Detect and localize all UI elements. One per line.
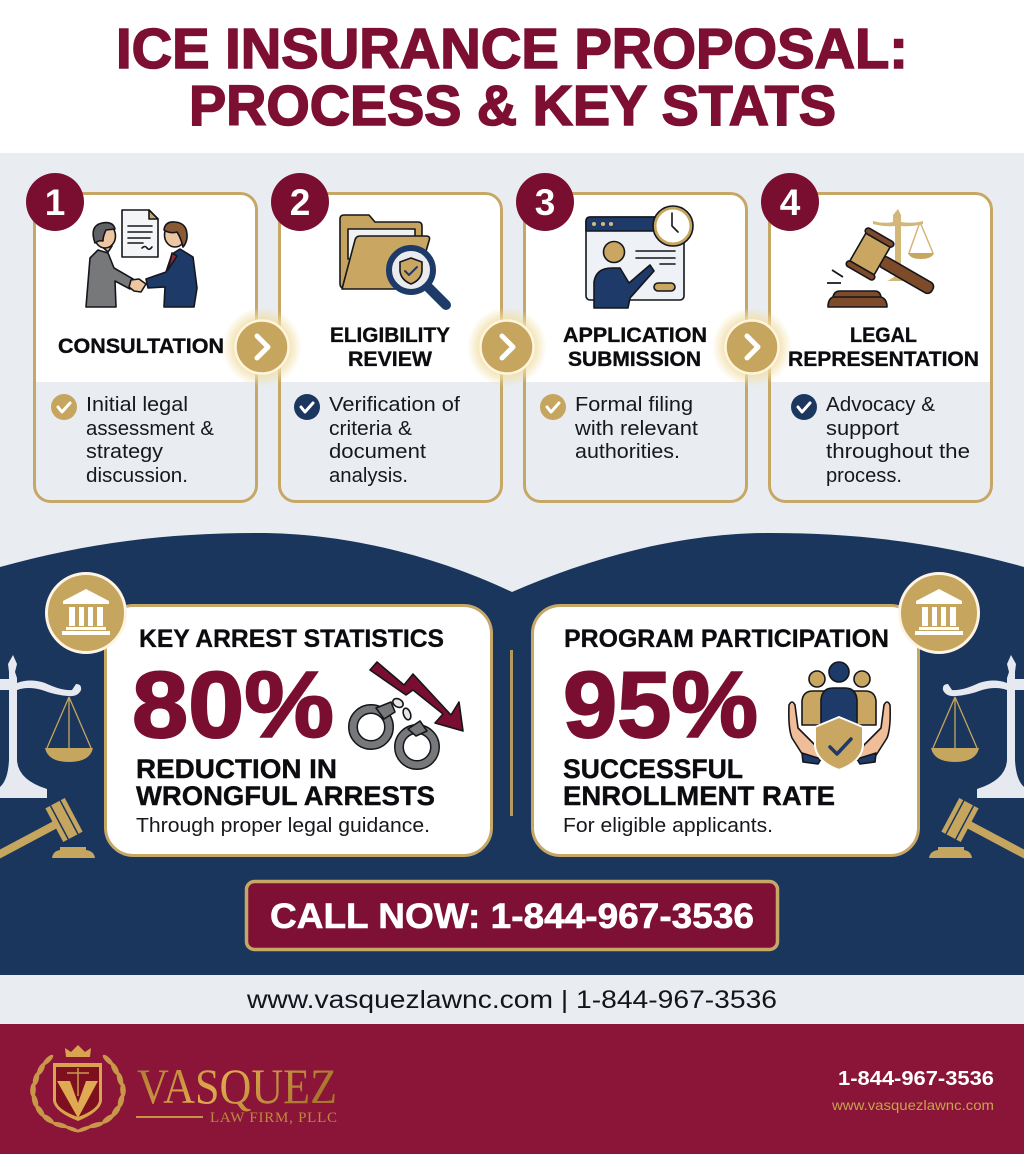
call to action button (246, 882, 778, 950)
panel: step 2 eligibility review (278, 192, 503, 503)
arrow: step 2 to 3 (467, 307, 547, 387)
stat: 80 percent: 80% (132, 652, 334, 757)
website and phone line: www.vasquezlawnc.com | 1-844-967-3536 (246, 986, 777, 1014)
heading: application submission: APPLICATION (563, 324, 707, 347)
decoration: left scales and gavel (0, 655, 95, 872)
icon: folder with magnifier (340, 215, 446, 305)
heading: program participation: PROGRAM PARTICIPATION (564, 625, 889, 653)
icon: handcuffs and falling arrow (353, 662, 463, 765)
text: reduction in wrongful arrests: WRONGFUL ARRESTS (136, 781, 435, 811)
stat: 95 percent: 95% (563, 652, 758, 757)
text: application description: Formal filing (575, 393, 693, 416)
icon: right courthouse medallion (900, 574, 978, 652)
divider (510, 650, 513, 816)
text: successful enrollment rate (563, 754, 835, 811)
heading: legal representation: LEGAL (850, 324, 917, 347)
text: eligibility description: document (329, 440, 426, 463)
icon: left courthouse medallion (46, 574, 126, 652)
heading: consultation: CONSULTATION (58, 335, 224, 358)
footer website: www.vasquezlawnc.com (831, 1097, 994, 1113)
text: consultation description: assessment & (86, 417, 214, 440)
number badge 3: 3 (535, 182, 555, 223)
text: representation description: throughout the (826, 440, 970, 463)
logo: firm name: LAW FIRM, PLLC (210, 1110, 337, 1126)
icon: online application with clock (586, 206, 693, 308)
number badge 3 (516, 173, 574, 231)
heading: legal representation (788, 324, 979, 371)
text: eligibility description: criteria & (329, 417, 412, 440)
text: application description (574, 393, 698, 463)
text: eligibility description (329, 393, 460, 487)
footer band (0, 1024, 1024, 1154)
panel: step 3 application submission (523, 192, 748, 503)
icon: navy check (294, 394, 320, 420)
icon: people protected by shield and hands (789, 662, 890, 770)
number badge 2 (271, 173, 329, 231)
text: successful enrollment rate: SUCCESSFUL (563, 754, 743, 784)
heading: application submission: SUBMISSION (568, 348, 701, 371)
text: representation description (826, 393, 970, 487)
text: consultation description (86, 393, 214, 487)
heading: application submission (563, 324, 707, 371)
text: application description: with relevant (574, 417, 698, 440)
number badge 4: 4 (780, 182, 801, 223)
text: for eligible applicants: For eligible applicants. (563, 814, 773, 837)
heading: key arrest statistics: KEY ARREST STATISTICS (139, 625, 444, 653)
number badge 2: 2 (290, 182, 310, 223)
heading: eligibility review (330, 324, 450, 371)
title (116, 17, 908, 138)
logo: firm name: VASQUEZ (137, 1058, 337, 1114)
text: consultation description: strategy (86, 440, 164, 463)
text: through proper legal guidance: Through proper legal guidance. (136, 814, 430, 837)
footer phone: 1-844-967-3536 (838, 1067, 994, 1090)
page background (0, 153, 1024, 1024)
icon: gavel and scales (827, 209, 943, 309)
number badge 1: 1 (45, 182, 65, 223)
number badge 1 (26, 173, 84, 231)
text: successful enrollment rate: ENROLLMENT RATE (563, 781, 835, 811)
decoration: right scales and gavel (929, 655, 1024, 872)
text: eligibility description: analysis. (329, 464, 408, 487)
panel: program participation (532, 606, 918, 856)
heading: eligibility review: REVIEW (348, 348, 432, 371)
panel: key arrest statistics (106, 606, 492, 856)
icon: gold check (51, 394, 77, 420)
text: consultation description: discussion. (86, 464, 188, 487)
text: consultation description: Initial legal (86, 393, 188, 416)
text: reduction in wrongful arrests (136, 754, 435, 811)
text: reduction in wrongful arrests: REDUCTION IN (136, 754, 337, 784)
call to action button: CALL NOW: 1-844-967-3536 (270, 897, 754, 936)
text: representation description: process. (826, 464, 902, 487)
panel: step 4 legal representation (768, 192, 993, 503)
text: application description: authorities. (575, 440, 680, 463)
heading: legal representation: REPRESENTATION (788, 348, 979, 371)
icon: navy check (791, 394, 817, 420)
panel: step 1 consultation (33, 192, 258, 503)
icon: gold check (540, 394, 566, 420)
title: ICE INSURANCE PROPOSAL: (116, 17, 908, 81)
icon: handshake with document (86, 210, 197, 307)
text: representation description: support (826, 417, 899, 440)
arrow: step 1 to 2 (222, 307, 302, 387)
heading: eligibility review: ELIGIBILITY (330, 324, 450, 347)
text: eligibility description: Verification of (329, 393, 460, 416)
number badge 4 (761, 173, 819, 231)
title: PROCESS & KEY STATS (189, 74, 836, 138)
text: representation description: Advocacy & (826, 393, 935, 416)
logo: shield, crown and wreath (30, 1045, 126, 1134)
arrow: step 3 to 4 (712, 307, 792, 387)
navy arched band (0, 533, 1024, 975)
